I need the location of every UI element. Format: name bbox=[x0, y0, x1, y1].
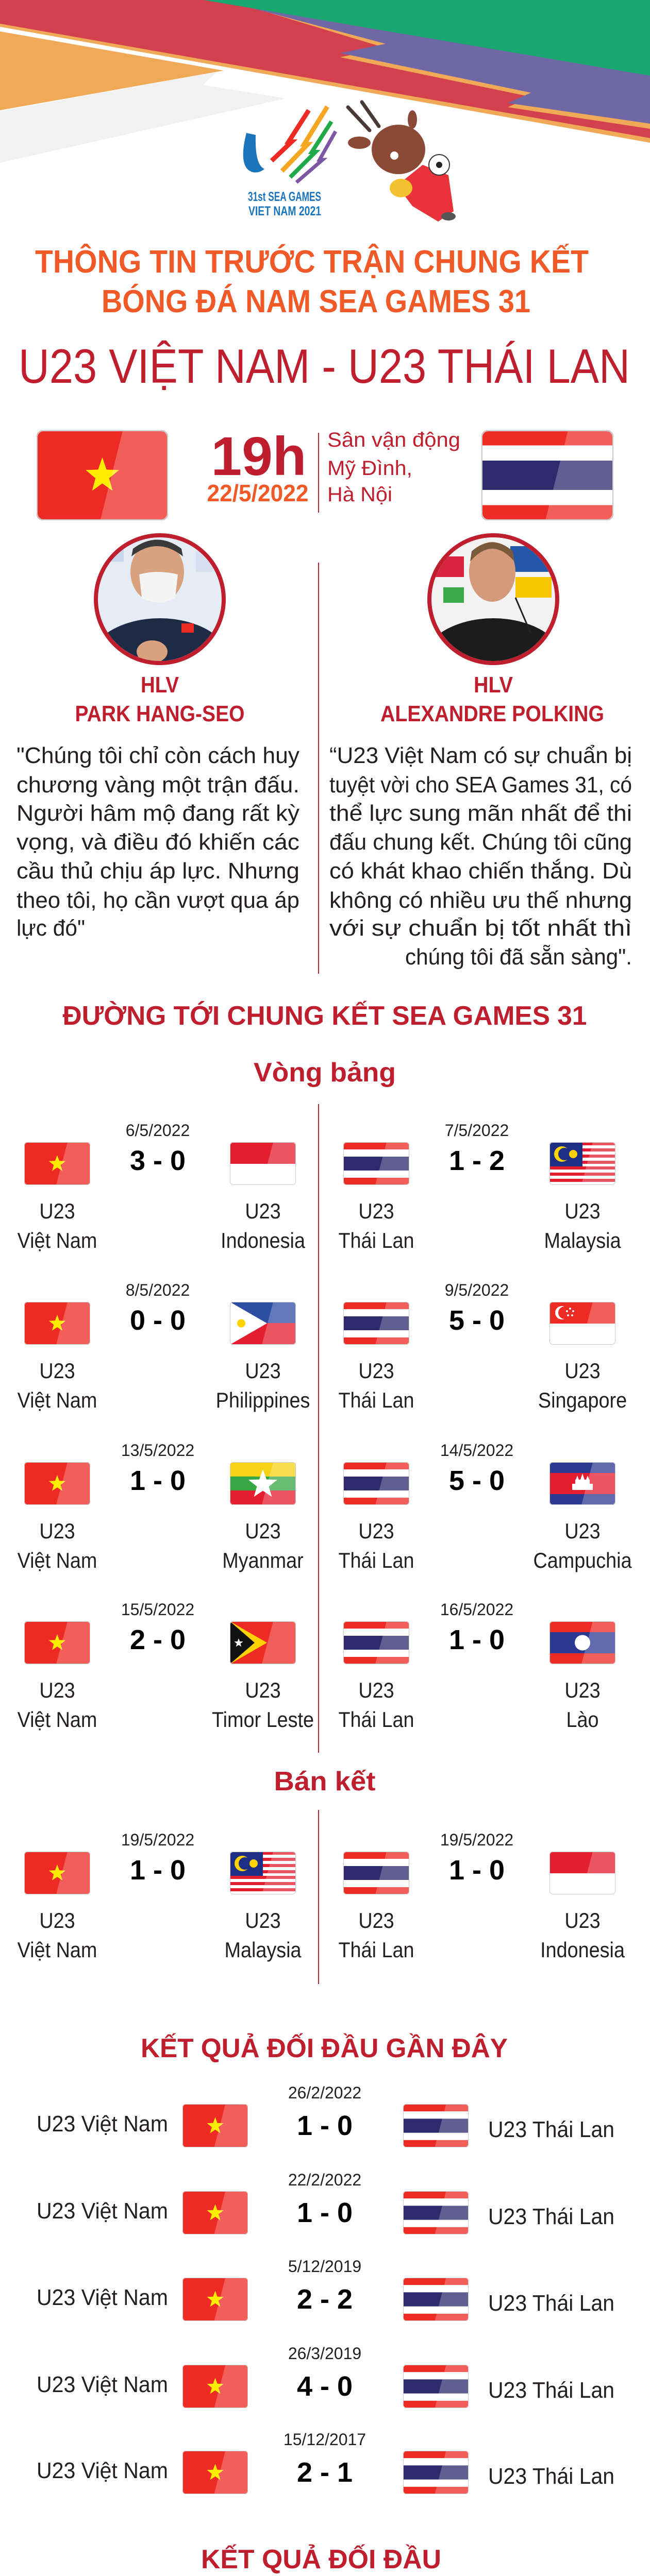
h2h row 26/3/2019: 4 - 0 bbox=[297, 2371, 353, 2402]
match: VN vs Myanmar: Việt Nam bbox=[18, 1549, 97, 1572]
match: Thailand vs Singapore: U23 bbox=[564, 1359, 601, 1383]
match: VN vs Timor Leste: 15/5/2022 bbox=[121, 1600, 194, 1619]
quote: Park Hang-seo: Người hâm mộ đang rất kỳ bbox=[16, 801, 299, 826]
logo: 31st SEA Games bbox=[243, 107, 336, 218]
match: Thailand vs Singapore: 5 - 0 bbox=[449, 1305, 505, 1336]
quote: Alexandre Polking bbox=[329, 743, 632, 970]
match: Thailand vs Laos: 1 - 0 bbox=[449, 1624, 505, 1655]
semi-final: VN vs Malaysia: 1 - 0 bbox=[130, 1855, 186, 1886]
match: Thailand vs Singapore: 9/5/2022 bbox=[445, 1281, 509, 1299]
quote: Park Hang-seo bbox=[16, 743, 299, 941]
quote: Alexandre Polking: đấu chung kết. Chúng tôi cũng bbox=[329, 829, 632, 855]
semi-final: VN vs Malaysia: U23 bbox=[245, 1909, 281, 1933]
match: VN vs Indonesia: Việt Nam bbox=[18, 1229, 97, 1252]
section heading: recent head-to-head: KẾT QUẢ ĐỐI ĐẦU GẦN ĐÂY bbox=[141, 2033, 508, 2063]
h2h row 22/2/2022 bbox=[37, 2171, 614, 2234]
quote: Alexandre Polking: chúng tôi đã sẵn sàng". bbox=[405, 944, 632, 970]
semi-final: Thailand vs Indonesia: U23 bbox=[358, 1909, 394, 1933]
match: Thailand vs Cambodia: 14/5/2022 bbox=[440, 1441, 513, 1460]
h2h row 26/2/2022: 1 - 0 bbox=[297, 2110, 353, 2141]
logo: 31st SEA Games: VIET NAM 2021 bbox=[248, 204, 321, 218]
section heading: road to final: ĐƯỜNG TỚI CHUNG KẾT SEA GAMES 31 bbox=[63, 1001, 587, 1031]
flag: Thailand large bbox=[481, 430, 613, 520]
coach name: Alexandre Polking: ALEXANDRE POLKING bbox=[380, 701, 604, 726]
match: Thailand vs Malaysia: U23 bbox=[358, 1199, 394, 1223]
match: VN vs Philippines: Việt Nam bbox=[18, 1388, 97, 1412]
h2h row 15/12/2017: 15/12/2017 bbox=[284, 2430, 366, 2449]
semi-final: VN vs Malaysia: Malaysia bbox=[224, 1938, 302, 1962]
match time and date: 19h bbox=[211, 426, 306, 487]
match: Thailand vs Malaysia: Thái Lan bbox=[338, 1229, 414, 1252]
logo: 31st SEA Games: 31st SEA GAMES bbox=[248, 190, 321, 204]
h2h row 26/3/2019: U23 Việt Nam bbox=[37, 2372, 168, 2397]
match: Thailand vs Malaysia bbox=[338, 1121, 621, 1252]
title: THÔNG TIN TRƯỚC TRẬN CHUNG KẾT bbox=[35, 244, 589, 280]
match: VN vs Timor Leste bbox=[18, 1600, 314, 1732]
match: Thailand vs Cambodia: 5 - 0 bbox=[449, 1465, 505, 1496]
match: VN vs Indonesia: 3 - 0 bbox=[130, 1145, 186, 1176]
match: Thailand vs Laos: U23 bbox=[358, 1679, 394, 1702]
match: Thailand vs Laos: Lào bbox=[566, 1708, 599, 1732]
coach photo: Alexandre Polking bbox=[427, 533, 559, 665]
match: Thailand vs Cambodia bbox=[338, 1441, 632, 1572]
h2h row 15/12/2017: 2 - 1 bbox=[297, 2457, 353, 2488]
match: VN vs Timor Leste: U23 bbox=[245, 1679, 281, 1702]
match: VN vs Myanmar: 13/5/2022 bbox=[121, 1441, 194, 1460]
h2h row 26/3/2019: 26/3/2019 bbox=[288, 2344, 361, 2363]
coach name: Park Hang-seo: HLV bbox=[141, 672, 179, 698]
quote: Alexandre Polking: thể lực sung mãn nhất để thi bbox=[329, 801, 632, 826]
semi-final: Thailand vs Indonesia: Indonesia bbox=[540, 1938, 625, 1962]
coach photo: Park Hang-seo bbox=[94, 533, 226, 665]
quote: Alexandre Polking: “U23 Việt Nam có sự chuẩn bị bbox=[329, 743, 632, 768]
match: Thailand vs Singapore: Singapore bbox=[538, 1388, 627, 1412]
match: VN vs Indonesia: Indonesia bbox=[221, 1229, 306, 1252]
match: Thailand vs Cambodia: U23 bbox=[358, 1519, 394, 1543]
semi-final: VN vs Malaysia: Việt Nam bbox=[18, 1938, 97, 1962]
semi-final: Thailand vs Indonesia: 1 - 0 bbox=[449, 1855, 505, 1886]
match: VN vs Philippines: U23 bbox=[245, 1359, 281, 1383]
h2h row 26/2/2022: U23 Việt Nam bbox=[37, 2111, 168, 2137]
h2h row 22/2/2022: U23 Việt Nam bbox=[37, 2198, 168, 2224]
semi-final: Thailand vs Indonesia: U23 bbox=[564, 1909, 601, 1933]
h2h row 22/2/2022: U23 Thái Lan bbox=[488, 2204, 614, 2229]
title bbox=[35, 244, 589, 319]
quote: Alexandre Polking: có khát khao chiến thắng. Dù bbox=[329, 858, 632, 884]
coach name: Alexandre Polking: HLV bbox=[474, 672, 513, 698]
match: Thailand vs Cambodia: Thái Lan bbox=[338, 1549, 414, 1572]
match: VN vs Philippines: U23 bbox=[39, 1359, 75, 1383]
venue: Mỹ Đình, bbox=[327, 457, 412, 480]
h2h row 26/3/2019 bbox=[37, 2344, 614, 2408]
match: Thailand vs Singapore: U23 bbox=[358, 1359, 394, 1383]
match: Thailand vs Laos: Thái Lan bbox=[338, 1708, 414, 1732]
header decorative band bbox=[0, 0, 650, 163]
quote: Park Hang-seo: theo tôi, họ cần vượt qua áp bbox=[16, 888, 299, 913]
match: VN vs Philippines: 8/5/2022 bbox=[126, 1281, 190, 1299]
h2h row 26/2/2022 bbox=[37, 2083, 614, 2147]
h2h row 15/12/2017: U23 Việt Nam bbox=[37, 2458, 168, 2483]
quote: Park Hang-seo: vọng, và điều đó khiến các bbox=[16, 829, 299, 855]
match: Thailand vs Malaysia: 7/5/2022 bbox=[445, 1121, 509, 1140]
subheading: semi-finals: Bán kết bbox=[274, 1767, 375, 1797]
title: BÓNG ĐÁ NAM SEA GAMES 31 bbox=[102, 284, 530, 319]
match: VN vs Myanmar bbox=[18, 1441, 304, 1572]
quote: Park Hang-seo: cầu thủ chịu áp lực. Nhưng bbox=[16, 858, 299, 884]
match: VN vs Indonesia: 6/5/2022 bbox=[126, 1121, 190, 1140]
match: VN vs Philippines bbox=[18, 1281, 310, 1412]
match: Thailand vs Malaysia: 1 - 2 bbox=[449, 1145, 505, 1176]
h2h row 5/12/2019: 5/12/2019 bbox=[288, 2257, 361, 2276]
quote: Alexandre Polking: với sự chuẩn bị tốt nhất thì bbox=[329, 916, 632, 941]
flag: Vietnam large bbox=[37, 430, 168, 520]
match: VN vs Myanmar: Myanmar bbox=[222, 1549, 304, 1572]
match: VN vs Philippines: 0 - 0 bbox=[130, 1305, 186, 1336]
match: VN vs Indonesia: U23 bbox=[39, 1199, 75, 1223]
venue bbox=[327, 429, 460, 506]
quote: Park Hang-seo: lực đó" bbox=[16, 916, 85, 941]
h2h row 26/2/2022: 26/2/2022 bbox=[288, 2083, 361, 2102]
match: VN vs Timor Leste: Timor Leste bbox=[212, 1708, 314, 1732]
venue: Hà Nội bbox=[327, 483, 392, 506]
venue: Sân vận động bbox=[327, 429, 460, 451]
h2h row 26/3/2019: U23 Thái Lan bbox=[488, 2378, 614, 2403]
semi-final: Thailand vs Indonesia: 19/5/2022 bbox=[440, 1831, 513, 1849]
match: VN vs Myanmar: U23 bbox=[39, 1519, 75, 1543]
coach name: Park Hang-seo bbox=[75, 672, 244, 726]
quote: Alexandre Polking: tuyệt vời cho SEA Games 31, có bbox=[329, 772, 632, 798]
subheading: group stage: Vòng bảng bbox=[254, 1058, 396, 1088]
match: Thailand vs Cambodia: U23 bbox=[564, 1519, 601, 1543]
semi-final: VN vs Malaysia: U23 bbox=[39, 1909, 75, 1933]
match: VN vs Philippines: Philippines bbox=[216, 1388, 310, 1412]
section heading: SEA Games finals head-to-head: KẾT QUẢ ĐỐI ĐẦU bbox=[201, 2544, 441, 2574]
match: Thailand vs Singapore: Thái Lan bbox=[338, 1388, 414, 1412]
h2h row 15/12/2017: U23 Thái Lan bbox=[488, 2464, 614, 2489]
semi-final: Thailand vs Indonesia bbox=[338, 1831, 625, 1962]
h2h row 5/12/2019: 2 - 2 bbox=[297, 2284, 353, 2315]
match: VN vs Myanmar: U23 bbox=[245, 1519, 281, 1543]
match: Thailand vs Malaysia: Malaysia bbox=[544, 1229, 621, 1252]
match: VN vs Indonesia bbox=[18, 1121, 306, 1252]
match: Thailand vs Malaysia: U23 bbox=[564, 1199, 601, 1223]
semi-final: VN vs Malaysia bbox=[18, 1831, 302, 1962]
quote: Park Hang-seo: "Chúng tôi chỉ còn cách huy bbox=[16, 743, 299, 768]
match: Thailand vs Cambodia: Campuchia bbox=[533, 1549, 632, 1572]
quote: Alexandre Polking: không có nhiều ưu thế nhưng bbox=[329, 888, 632, 913]
h2h row 5/12/2019: U23 Việt Nam bbox=[37, 2285, 168, 2310]
quote: Park Hang-seo: chương vàng một trận đấu. bbox=[16, 772, 299, 798]
coach name: Park Hang-seo: PARK HANG-SEO bbox=[75, 701, 244, 726]
semi-final: VN vs Malaysia: 19/5/2022 bbox=[121, 1831, 194, 1849]
match: VN vs Timor Leste: 2 - 0 bbox=[130, 1624, 186, 1655]
h2h row 26/2/2022: U23 Thái Lan bbox=[488, 2117, 614, 2142]
match: VN vs Timor Leste: U23 bbox=[39, 1679, 75, 1702]
mascot: sao la goat with ball bbox=[348, 102, 456, 222]
h2h row 15/12/2017 bbox=[37, 2430, 614, 2494]
semi-final: Thailand vs Indonesia: Thái Lan bbox=[338, 1938, 414, 1962]
h2h row 5/12/2019 bbox=[37, 2257, 614, 2321]
h2h row 5/12/2019: U23 Thái Lan bbox=[488, 2291, 614, 2316]
h2h row 22/2/2022: 1 - 0 bbox=[297, 2197, 353, 2228]
match: Thailand vs Laos: 16/5/2022 bbox=[440, 1600, 513, 1619]
match: VN vs Myanmar: 1 - 0 bbox=[130, 1465, 186, 1496]
coach name: Alexandre Polking bbox=[380, 672, 604, 726]
match: Thailand vs Laos bbox=[338, 1600, 615, 1732]
h2h row 22/2/2022: 22/2/2022 bbox=[288, 2171, 361, 2189]
match: Thailand vs Laos: U23 bbox=[564, 1679, 601, 1702]
match time and date: 22/5/2022 bbox=[207, 480, 308, 506]
match: VN vs Indonesia: U23 bbox=[245, 1199, 281, 1223]
match: VN vs Timor Leste: Việt Nam bbox=[18, 1708, 97, 1732]
match: Thailand vs Singapore bbox=[338, 1281, 627, 1412]
